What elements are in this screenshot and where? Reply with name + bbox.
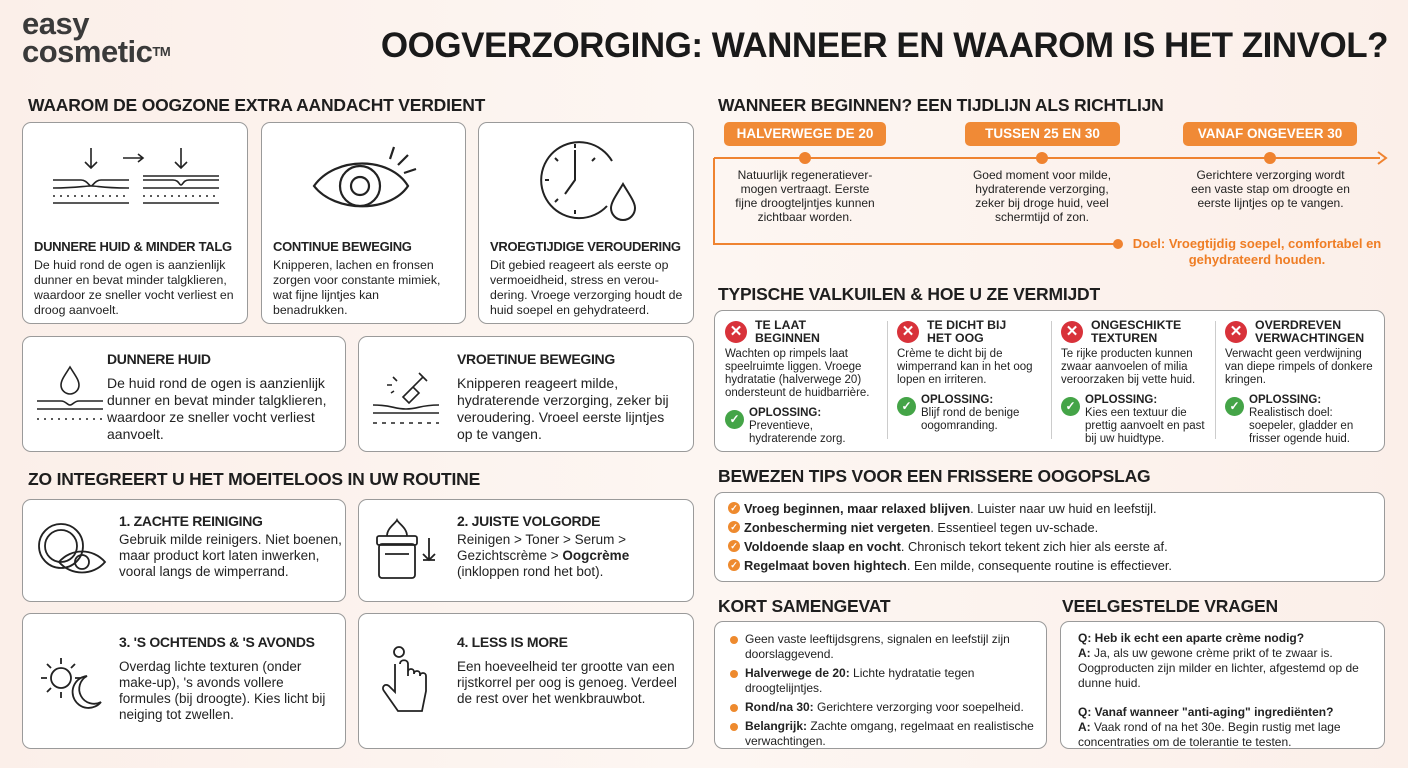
column: textures: ONGESCHIKTE TEXTUREN bbox=[1091, 318, 1181, 345]
timeline text 2: Goed moment voor milde, hydraterende verzorging, zeker bij droge huid, veel schermtijd of zon. bbox=[973, 168, 1111, 224]
panel: tips: Zonbescherming niet vergeten. Essentieel tegen uv-schade. bbox=[744, 520, 1098, 535]
column: te dicht: TE DICHT BIJ HET OOG bbox=[927, 318, 1006, 345]
column: te dicht: ✕ bbox=[902, 323, 914, 340]
timeline bbox=[713, 122, 1388, 267]
logo bbox=[22, 6, 170, 69]
card: vroetinue beweging bbox=[358, 336, 694, 452]
column: verwachtingen: OPLOSSING: bbox=[1249, 394, 1321, 406]
heading: kort samengevat: KORT SAMENGEVAT bbox=[718, 596, 890, 616]
card: juiste volgorde: Reinigen > Toner > Serum > Gezichtscrème > Oogcrème (inkloppen rond het bot). bbox=[457, 532, 629, 579]
pill: vanaf bbox=[1183, 122, 1357, 146]
panel: tips: Regelmaat boven hightech. Een milde, consequente routine is effectiever. bbox=[744, 558, 1172, 573]
panel: faq: Q: Heb ik echt een aparte crème nodig? bbox=[1078, 631, 1304, 645]
card: juiste volgorde: 2. JUISTE VOLGORDE bbox=[457, 513, 600, 529]
card: dunnere huid bbox=[22, 336, 346, 452]
panel: faq: Q: Vanaf wanneer "anti-aging" ingrediënten? bbox=[1078, 705, 1333, 719]
column: textures: Kies een textuur die prettig aanvoelt en past bij uw huidtype. bbox=[1085, 407, 1205, 445]
title: OOGVERZORGING: WANNEER EN WAAROM IS HET ZINVOL? bbox=[381, 26, 1388, 65]
card: dunnere huid: De huid rond de ogen is aanzienlijk dunner en bevat minder talgklieren, waardoor ze sneller vocht verliest aanvoelt. bbox=[107, 375, 326, 442]
column: te laat bbox=[725, 318, 870, 445]
timeline text 3: Gerichtere verzorging wordt een vaste stap om droogte en eerste lijntjes op te vangen. bbox=[1191, 168, 1350, 210]
icon: eye bbox=[312, 146, 416, 208]
panel: samenvatting: Geen vaste leeftijdsgrens, signalen en leefstijl zijn doorslaggevend. bbox=[745, 632, 1010, 661]
column: verwachtingen: Verwacht geen verdwijning van diepe rimpels of donkere kringen. bbox=[1225, 348, 1373, 386]
card: continue beweging bbox=[261, 122, 466, 324]
column: textures bbox=[1061, 318, 1205, 445]
icon: skin layers bbox=[53, 148, 219, 204]
icon: pad and eye bbox=[38, 523, 106, 574]
icon: pipette bbox=[373, 372, 439, 424]
pill: halverwege: HALVERWEGE DE 20 bbox=[737, 126, 873, 141]
logo: cosmeticTM bbox=[22, 34, 170, 69]
column: te laat: TE LAAT BEGINNEN bbox=[755, 318, 820, 345]
card: zachte reiniging bbox=[22, 499, 346, 602]
panel: samenvatting: Rond/na 30: Gerichtere verzorging voor soepelheid. bbox=[745, 700, 1024, 714]
card: zachte reiniging: Gebruik milde reinigers. Niet boenen, maar product kort laten inwerken, vooral langs de wimperrand. bbox=[119, 532, 342, 579]
card: less is more bbox=[358, 613, 694, 749]
panel: tips: Voldoende slaap en vocht. Chronisch tekort tekent zich hier als eerste af. bbox=[744, 539, 1168, 554]
card: vroetinue beweging: VROETINUE BEWEGING bbox=[457, 351, 615, 367]
column: te laat: ✕ bbox=[730, 323, 742, 340]
heading: valkuilen: TYPISCHE VALKUILEN & HOE U ZE VERMIJDT bbox=[718, 284, 1100, 304]
column: te dicht: OPLOSSING: bbox=[921, 394, 993, 406]
card: continue beweging: Knipperen, lachen en fronsen zorgen voor constante mimiek, wat fijne lijntjes kan benadrukken. bbox=[273, 258, 440, 317]
card: dunnere huid & minder talg: De huid rond de ogen is aanzienlijk dunner en bevat minder talgklieren, waardoor ze sneller vocht verliest en droog aanvoelt. bbox=[34, 258, 234, 317]
column: verwachtingen: ✕ bbox=[1230, 323, 1242, 340]
pill: tussen bbox=[965, 122, 1120, 146]
card: vroegtijdige veroudering: Dit gebied reageert als eerste op vermoeidheid, stress en verou-dering. Vroege verzorging houdt de huid soepel en gehydrateerd. bbox=[490, 258, 682, 317]
heading: routine: ZO INTEGREERT U HET MOEITELOOS IN UW ROUTINE bbox=[28, 469, 480, 489]
column: textures: Te rijke producten kunnen zwaar aanvoelen of milia veroorzaken bij vette huid. bbox=[1061, 348, 1195, 386]
column: textures: OPLOSSING: bbox=[1085, 394, 1157, 406]
column: verwachtingen: ✓ bbox=[1229, 399, 1240, 413]
card: dunnere huid: DUNNERE HUID bbox=[107, 351, 211, 367]
card: ochtends & avonds bbox=[22, 613, 346, 749]
column: te dicht: Crème te dicht bij de wimperrand kan in het oog lopen en irriteren. bbox=[897, 348, 1033, 386]
text: DUNNERE HUID & MINDER TALG bbox=[34, 239, 232, 254]
heading: tips: BEWEZEN TIPS VOOR EEN FRISSERE OOGOPSLAG bbox=[718, 466, 1150, 486]
heading: faq: VEELGESTELDE VRAGEN bbox=[1062, 596, 1278, 616]
panel: faq bbox=[1060, 621, 1385, 749]
card: zachte reiniging: 1. ZACHTE REINIGING bbox=[119, 513, 263, 529]
heading: wanneer beginnen: WANNEER BEGINNEN? EEN TIJDLIJN ALS RICHTLIJN bbox=[718, 95, 1164, 115]
panel: samenvatting: Belangrijk: Zachte omgang, regelmaat en realistische verwachtingen. bbox=[745, 719, 1034, 748]
column: verwachtingen: Realistisch doel: soepeler, gladder en frisser ogende huid. bbox=[1249, 407, 1353, 445]
panel: faq: A: Vaak rond of na het 30e. Begin rustig met lage concentraties om de tolerantie te testen. bbox=[1078, 720, 1341, 749]
icon: jar bbox=[376, 518, 436, 579]
column: te dicht bbox=[897, 318, 1033, 432]
column: te laat: Wachten op rimpels laat speelruimte liggen. Vroege hydratatie (halverwege 20) ondersteunt de huidbarrière. bbox=[725, 348, 870, 399]
card: vroegtijdige veroudering: VROEGTIJDIGE VEROUDERING bbox=[490, 239, 681, 254]
pill: halverwege bbox=[724, 122, 886, 146]
card: juiste volgorde bbox=[358, 499, 694, 602]
panel: samenvatting bbox=[714, 621, 1047, 749]
card: less is more: Een hoeveelheid ter grootte van een rijstkorrel per oog is genoeg. Verdeel de rest over het wenkbrauwbot. bbox=[457, 659, 677, 706]
column: textures: ✕ bbox=[1066, 323, 1078, 340]
pill: vanaf: VANAF ONGEVEER 30 bbox=[1198, 126, 1342, 141]
column: verwachtingen: OVERDREVEN VERWACHTINGEN bbox=[1255, 318, 1364, 345]
icon: drop on skin bbox=[37, 366, 103, 420]
panel: samenvatting: Halverwege de 20: Lichte hydratatie tegen droogtelijntjes. bbox=[745, 666, 974, 695]
card: vroetinue beweging: Knipperen reageert milde, hydraterende verzorging, zeker bij veroudering. Vroeel eerste lijntjes op te vangen. bbox=[457, 375, 669, 442]
panel: tips bbox=[714, 492, 1385, 582]
panel: tips: Vroeg beginnen, maar relaxed blijven. Luister naar uw huid en leefstijl. bbox=[744, 501, 1157, 516]
icon: sun and moon bbox=[41, 658, 102, 709]
card: less is more: 4. LESS IS MORE bbox=[457, 634, 568, 650]
heading: waarom: WAAROM DE OOGZONE EXTRA AANDACHT VERDIENT bbox=[28, 95, 485, 115]
icon: clock and drop bbox=[540, 141, 636, 221]
icon: finger bbox=[382, 646, 427, 712]
panel: valkuilen bbox=[714, 310, 1385, 452]
card: continue beweging: CONTINUE BEWEGING bbox=[273, 239, 412, 254]
card: ochtends & avonds: 3. 'S OCHTENDS & 'S AVONDS bbox=[119, 634, 315, 650]
goal: Doel: Vroegtijdig soepel, comfortabel en gehydrateerd houden. bbox=[1133, 236, 1381, 267]
card: ochtends & avonds: Overdag lichte texturen (onder make-up), 's avonds vollere formules (bij droogte). Kies licht bij neiging tot zwellen. bbox=[119, 659, 325, 722]
column: te laat: ✓ bbox=[729, 412, 740, 426]
column: te dicht: ✓ bbox=[901, 399, 912, 413]
column: te laat: Preventieve, hydraterende zorg. bbox=[749, 420, 846, 445]
column: te laat: OPLOSSING: bbox=[749, 407, 821, 419]
pill: tussen: TUSSEN 25 EN 30 bbox=[985, 126, 1100, 141]
column: verwachtingen bbox=[1225, 318, 1373, 445]
card: vroegtijdige veroudering bbox=[478, 122, 694, 324]
card: dunnere huid & minder talg bbox=[22, 122, 248, 324]
column: te dicht: Blijf rond de benige oogomranding. bbox=[921, 407, 1019, 432]
column: textures: ✓ bbox=[1065, 399, 1076, 413]
logo: easy bbox=[22, 6, 89, 41]
panel: faq: A: Ja, als uw gewone crème prikt of te zwaar is. Oogproducten zijn milder en lichter, afgestemd op de dunne huid. bbox=[1078, 646, 1359, 690]
timeline text 1: Natuurlijk regeneratiever-mogen vertraagt. Eerste fijne droogteljntjes kunnen zichtbaar worden. bbox=[735, 168, 875, 224]
